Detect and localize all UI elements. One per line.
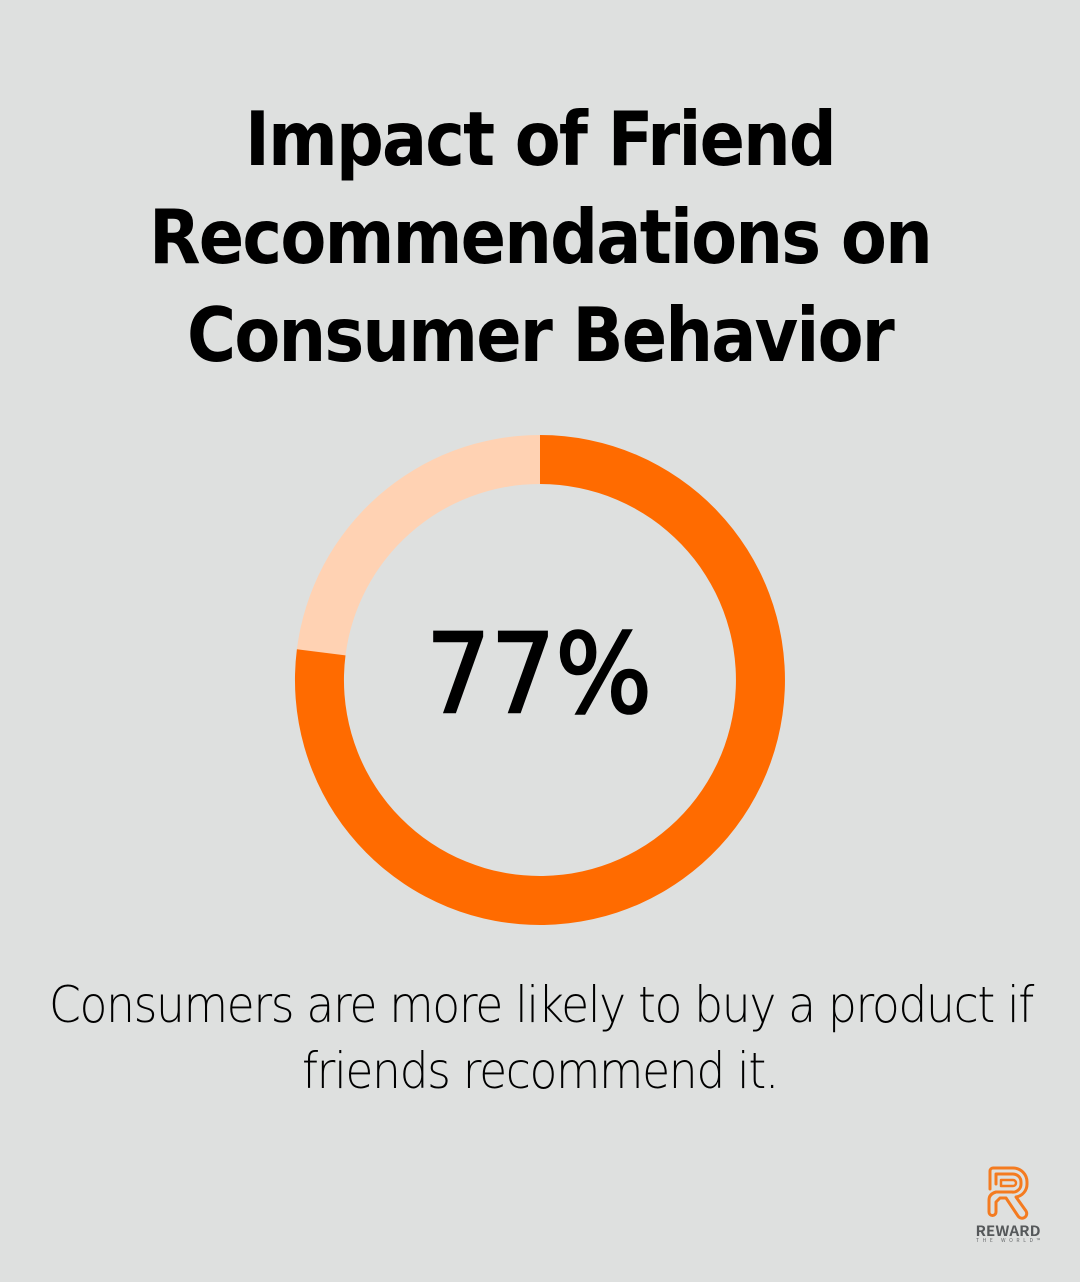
title: Impact of Friend [245, 95, 835, 183]
description text [49, 976, 1035, 1100]
percentage value: 77% [426, 610, 652, 738]
logo mark: letter R [989, 1168, 1027, 1218]
logo: Reward the World [976, 1168, 1040, 1244]
remaining 23% segment [297, 435, 540, 655]
logo wordmark: REWARD [976, 1221, 1040, 1241]
title: Consumer Behavior [187, 291, 895, 379]
logo tagline: THE WORLD™ [976, 1237, 1040, 1244]
title [149, 95, 931, 379]
title: Recommendations on [149, 193, 931, 281]
description text: friends recommend it. [302, 1042, 778, 1100]
highlighted 77% segment [295, 435, 785, 925]
donut chart: 77% [295, 435, 785, 925]
